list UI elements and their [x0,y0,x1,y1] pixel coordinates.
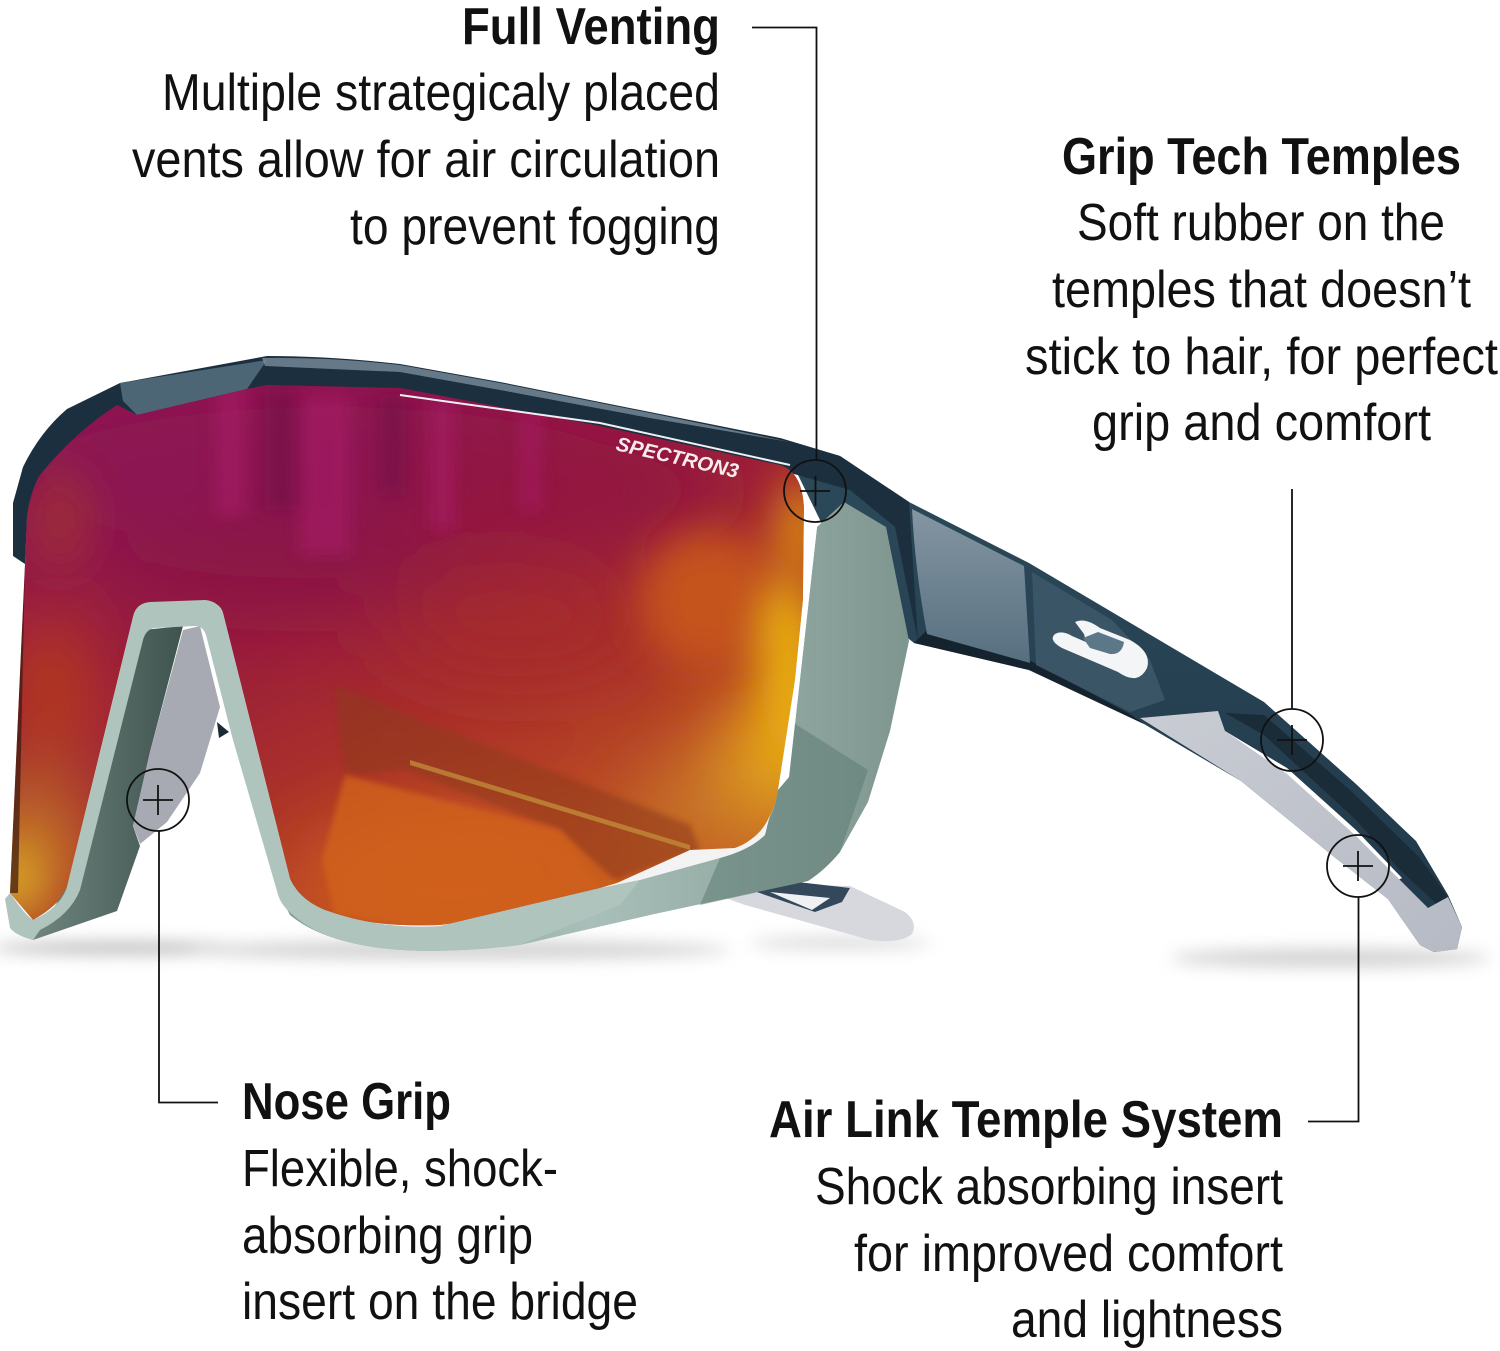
lens reflection of temple band [335,685,700,885]
temple logo [1053,620,1148,678]
nose grip grey insert [133,626,220,844]
air link grey insert [1140,711,1462,952]
text: nose grip description: absorbing grip [242,1207,533,1265]
text: air link description: Shock absorbing insert [815,1158,1283,1216]
leader line: full venting [752,28,816,460]
text: nose grip description: Flexible, shock- [242,1140,558,1198]
grey temple panel [912,509,1030,663]
white gap beside lens [778,510,817,790]
leader line: air link [1308,897,1358,1122]
marker: full venting [784,460,846,522]
dark frame top band and left corner [13,356,918,641]
text: full venting description: to prevent fogging [350,198,720,256]
lens vertical reflections [215,385,540,555]
text: air link description: for improved comfort [854,1225,1283,1283]
lens mirror surface [10,385,804,926]
text: grip tech description [1025,194,1498,452]
marker: nose grip [127,769,189,831]
text: grip tech description: Soft rubber on the [1077,194,1445,252]
ground shadow under frame [0,937,1490,967]
temple arm [780,438,1462,952]
text: grip tech description: grip and comfort [1092,394,1431,452]
text: air link description [815,1158,1283,1349]
heading: air link: Air Link Temple System [769,1091,1283,1149]
spectron lens mark: SPECTRON3 [614,433,741,483]
text: full venting description: vents allow for air circulation [132,131,720,189]
text: nose grip description: insert on the bridge [242,1273,638,1331]
far temple tip [690,858,914,941]
white slot [1218,730,1402,882]
callout: air link temple system [769,835,1389,1349]
callout: nose grip [127,769,638,1331]
nose piece dark side [33,626,183,940]
text: full venting description: Multiple strategicaly placed [162,64,720,122]
text: full venting description [132,64,720,256]
leader line: grip tech [1291,489,1293,709]
mint lens rim [5,600,640,951]
glasses illustration [0,356,1462,952]
heading: nose grip: Nose Grip [242,1073,451,1131]
callout: grip tech temples [1025,128,1498,771]
leader line: nose grip [159,831,218,1102]
text: air link description: and lightness [1011,1291,1283,1349]
white highlight along lens top [400,395,790,465]
text: nose grip description [242,1140,638,1331]
right mint frame side [277,502,909,951]
grip tech dark insert [1225,713,1448,907]
marker: grip tech [1261,709,1323,771]
marker: air link [1327,835,1389,897]
top vent piece [120,360,267,415]
dark temple underside [914,630,1144,724]
callout: full venting [132,0,846,522]
